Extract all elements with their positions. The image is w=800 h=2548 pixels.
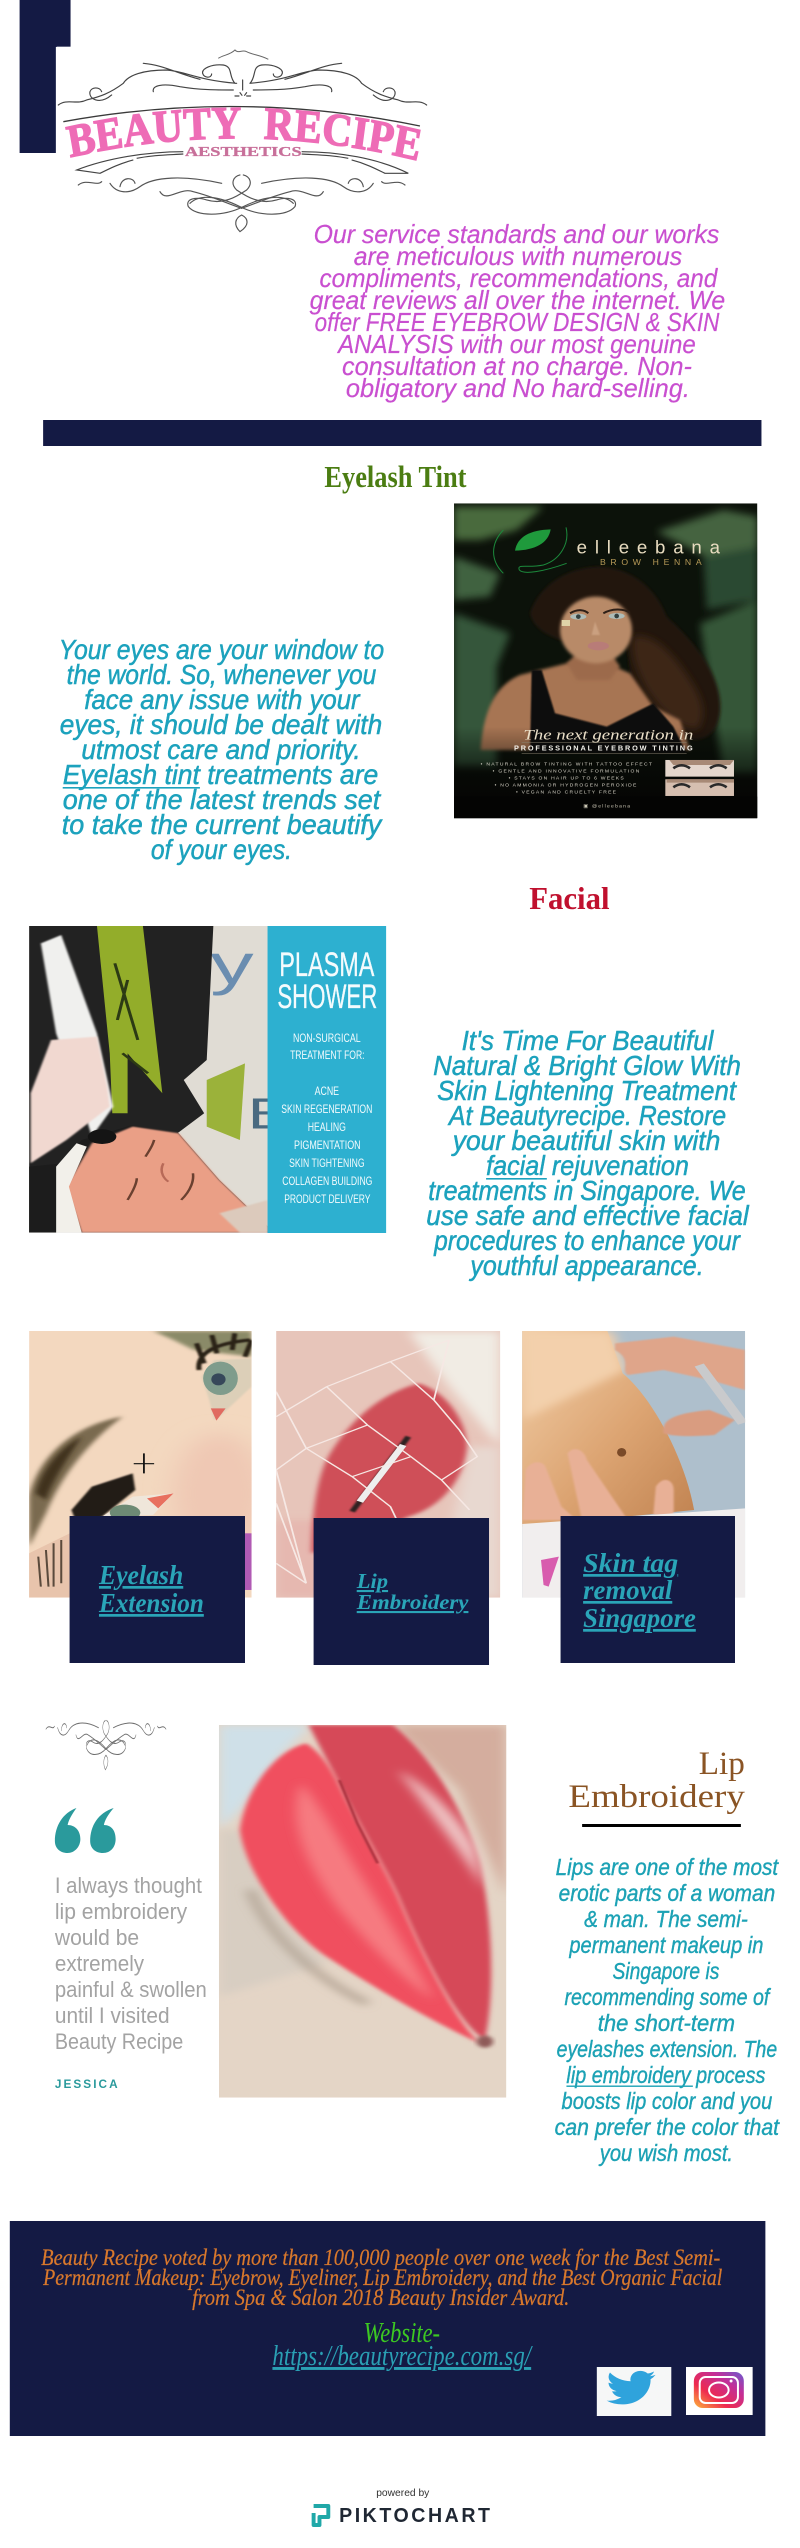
intro paragraph: compliments, recommendations, and — [319, 265, 718, 293]
card: Skin tag removal Singapore: Singapore — [583, 1603, 696, 1633]
card: Lip Embroidery: Lip — [356, 1570, 388, 1593]
photo: plasma shower treatment: COLLAGEN BUILDING — [282, 1174, 372, 1188]
model shoulders — [481, 660, 690, 750]
photo: plasma shower treatment — [29, 926, 408, 1233]
logo: Beauty Recipe Aesthetics: AESTHETICS — [185, 145, 302, 160]
card: Skin tag removal Singapore — [561, 1516, 735, 1663]
logo swirls — [58, 63, 427, 105]
heading: Lip Embroidery — [568, 1746, 746, 1815]
paragraph: lip embroidery — [555, 1854, 781, 2166]
heading: Lip Embroidery: Lip — [699, 1746, 745, 1782]
paragraph: facial: At Beautyrecipe. Restore — [447, 1100, 726, 1131]
testimonial — [54, 1873, 207, 2054]
photo: plasma shower treatment: SHOWER — [277, 979, 377, 1016]
paragraph: facial: treatments in Singapore. We — [428, 1175, 746, 1206]
testimonial: lip embroidery — [55, 1899, 187, 1924]
poster leaf logo — [494, 527, 567, 573]
intro paragraph: consultation at no charge. Non- — [342, 353, 692, 381]
card: Skin tag removal Singapore: removal — [583, 1575, 673, 1605]
photo: eyelash extension — [29, 1331, 265, 1598]
award text: Permanent Makeup: Eyebrow, Eyeliner, Lip Embroidery, and the Best Organic Facial — [42, 2265, 722, 2290]
logo: Beauty Recipe Aesthetics — [56, 46, 428, 232]
photo: plasma shower treatment: SKIN REGENERATION — [281, 1102, 372, 1116]
paragraph: facial: use safe and effective facial — [426, 1200, 750, 1231]
eyebrow — [29, 1417, 122, 1547]
poster: elleebana brow henna: ▣ @elleebana — [583, 803, 630, 809]
website url: https://beautyrecipe.com.sg/ — [272, 2340, 534, 2372]
testimonial: would be — [54, 1925, 139, 1950]
intro paragraph — [310, 221, 725, 403]
upper lip — [309, 1725, 491, 2040]
photo: plasma shower treatment: ACNE — [315, 1084, 339, 1098]
testimonial: Beauty Recipe — [55, 2029, 183, 2054]
paragraph: eyelash tint: face any issue with your — [84, 684, 361, 715]
footer panel — [10, 2221, 765, 2436]
treatment device — [41, 935, 113, 1137]
paragraph: lip embroidery: Lips are one of the most — [556, 1854, 780, 1880]
card: Skin tag removal Singapore: Skin tag — [583, 1548, 678, 1578]
paragraph: eyelash tint: to take the current beautify — [62, 809, 383, 840]
poster: elleebana brow henna — [454, 503, 757, 818]
icon: instagram — [686, 2367, 753, 2415]
poster: elleebana brow henna: • GENTLE AND INNOVATIVE FORMULATION — [493, 769, 640, 775]
intro paragraph: Our service standards and our works — [314, 221, 719, 249]
logo: Beauty Recipe Aesthetics: BEAUTY RECIPE — [65, 107, 421, 161]
card: Eyelash Extension: Eyelash — [98, 1560, 183, 1590]
intro paragraph: great reviews all over the internet. We — [310, 287, 725, 315]
photo: lip embroidery net — [276, 1331, 500, 1598]
quote mark — [55, 1808, 116, 1853]
paragraph: lip embroidery: lip embroidery process — [566, 2062, 765, 2088]
website label: Website- — [364, 2317, 440, 2348]
paragraph: eyelash tint — [59, 634, 384, 865]
model face — [566, 654, 622, 679]
powered by: powered by — [376, 2488, 430, 2499]
icon: twitter — [597, 2367, 671, 2416]
award text — [41, 2245, 722, 2310]
gripping hand — [615, 1337, 745, 1390]
card: Lip Embroidery — [314, 1518, 489, 1665]
card: Lip Embroidery: Embroidery — [356, 1591, 469, 1614]
poster: elleebana brow henna: • STAYS ON HAIR UP TO 6 WEEKS — [509, 776, 624, 782]
intro paragraph: obligatory and No hard-selling. — [346, 375, 690, 403]
photo: plasma shower treatment: PLASMA — [279, 947, 375, 984]
paragraph: lip embroidery: the short-term — [598, 2010, 735, 2036]
award text: from Spa & Salon 2018 Beauty Insider Award. — [192, 2285, 569, 2310]
photo: plasma shower treatment: y Clir — [210, 932, 408, 996]
photo: plasma shower treatment: HEALING — [308, 1120, 346, 1134]
testimonial: until I visited — [55, 2003, 170, 2028]
piktochart logo: PIKTOCHART — [339, 2505, 490, 2527]
paragraph: lip embroidery: you wish most. — [598, 2140, 733, 2166]
intro paragraph: ANALYSIS with our most genuine — [336, 331, 696, 359]
poster: elleebana brow henna: • NATURAL BROW TINTING WITH TATTOO EFFECT — [481, 761, 652, 767]
small ornament — [46, 1720, 166, 1770]
paragraph: eyelash tint: of your eyes. — [151, 834, 292, 865]
testimonial: extremely — [55, 1951, 144, 1976]
poster: elleebana brow henna: elleebana — [577, 536, 721, 557]
poster: elleebana brow henna: PROFESSIONAL EYEBROW TINTING — [514, 744, 693, 753]
practitioner suit — [29, 926, 213, 1233]
photo: plasma shower treatment: PIGMENTATION — [294, 1138, 361, 1152]
heading: Lip Embroidery: Embroidery — [568, 1779, 746, 1815]
paragraph: eyelash tint: Eyelash tint treatments are — [63, 759, 378, 790]
model hair — [530, 567, 720, 740]
paragraph: facial: procedures to enhance your — [433, 1225, 741, 1256]
paragraph: facial: It's Time For Beautiful — [462, 1025, 714, 1056]
lower eye — [71, 1473, 135, 1523]
paragraph: eyelash tint: eyes, it should be dealt with — [60, 709, 382, 740]
mole — [617, 1448, 626, 1457]
client face — [29, 1125, 268, 1233]
card: Eyelash Extension — [70, 1516, 245, 1663]
intro paragraph: offer FREE EYEBROW DESIGN & SKIN — [315, 309, 720, 337]
testimonial: painful & swollen — [55, 1977, 207, 2002]
photo: plasma shower treatment: SKIN TIGHTENING — [289, 1156, 365, 1170]
lower fingers — [522, 1449, 674, 1520]
poster: elleebana brow henna: BROW HENNA — [600, 557, 702, 567]
poster eye thumbnails — [665, 760, 734, 796]
paragraph: eyelash tint: Your eyes are your window to — [59, 634, 384, 665]
intro paragraph: are meticulous with numerous — [354, 243, 682, 271]
paragraph: facial: Skin Lightening Treatment — [437, 1075, 737, 1106]
paragraph: lip embroidery: erotic parts of a woman — [559, 1880, 775, 1906]
photo: plasma shower treatment: B — [248, 1089, 292, 1138]
paragraph: eyelash tint: the world. So, whenever you — [67, 659, 376, 690]
testimonial author: JESSICA — [55, 2077, 118, 2091]
navy corner block — [20, 0, 71, 153]
photo: plasma shower treatment: TREATMENT FOR: — [290, 1048, 365, 1062]
paragraph: lip embroidery: can prefer the color that — [555, 2114, 781, 2140]
photo: plasma shower treatment: PRODUCT DELIVERY — [284, 1192, 370, 1206]
paragraph: facial: your beautiful skin with — [451, 1125, 720, 1156]
lower lip — [240, 1743, 480, 2043]
paragraph: lip embroidery: recommending some of — [564, 1984, 772, 2010]
paragraph: lip embroidery: & man. The semi- — [584, 1906, 748, 1932]
card: Eyelash Extension: Extension — [98, 1588, 204, 1618]
award text: Beauty Recipe voted by more than 100,000 people over one week for the Best Semi- — [41, 2245, 720, 2270]
heading: Eyelash Tint: Eyelash Tint — [324, 460, 467, 494]
poster: elleebana brow henna: • NO AMMONIA OR HYDROGEN PEROXIDE — [495, 783, 637, 789]
paragraph: lip embroidery: boosts lip color and you — [562, 2088, 773, 2114]
paragraph: facial: facial rejuvenation — [486, 1150, 689, 1181]
heading: Facial: Facial — [529, 881, 610, 916]
paragraph: facial: youthful appearance. — [469, 1250, 704, 1281]
photo: skin tag removal — [522, 1331, 745, 1598]
navy divider band — [43, 420, 761, 446]
paragraph: facial: Natural & Bright Glow With — [433, 1050, 741, 1081]
paragraph: lip embroidery: Singapore is — [613, 1958, 719, 1984]
poster: elleebana brow henna: • VEGAN AND CRUELTY FREE — [516, 790, 617, 796]
paragraph: eyelash tint: utmost care and priority. — [81, 734, 361, 765]
paragraph: lip embroidery: permanent makeup in — [568, 1932, 763, 1958]
photo: plasma shower treatment: NON-SURGICAL — [293, 1031, 361, 1045]
testimonial: I always thought — [55, 1873, 202, 1898]
paragraph: eyelash tint: one of the latest trends set — [63, 784, 382, 815]
gloved hand — [31, 1037, 110, 1163]
paragraph: facial — [426, 1025, 750, 1281]
poster: elleebana brow henna: The next generation in — [523, 727, 693, 743]
photo: lips close-up — [219, 1725, 506, 2098]
